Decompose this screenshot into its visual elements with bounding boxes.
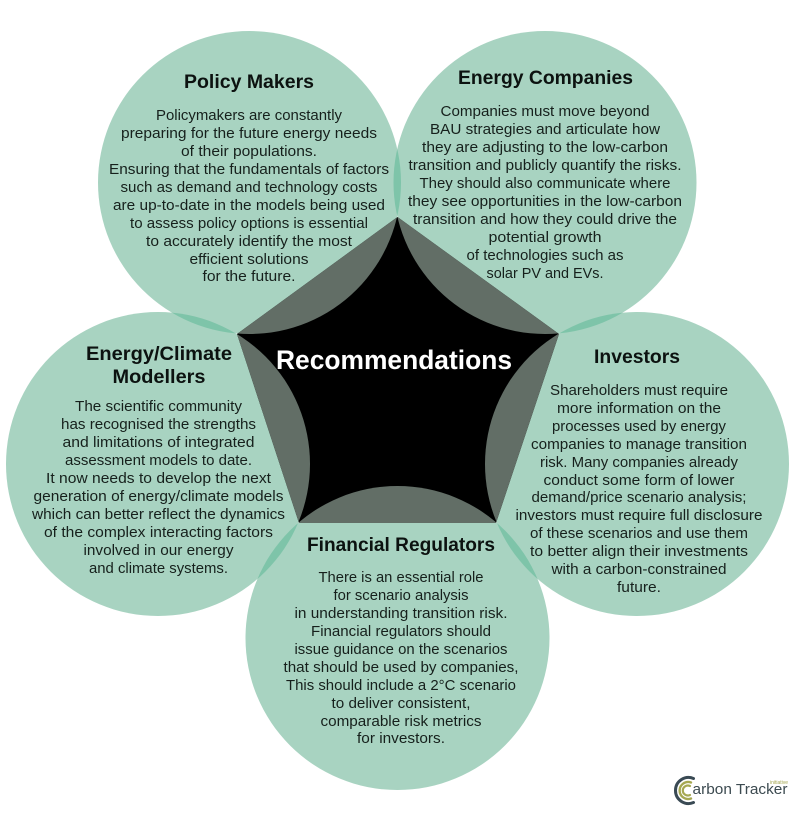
text block: energy companies: They should also communicate where	[420, 176, 670, 192]
text block: investors: companies to manage transition	[531, 437, 747, 453]
wordmark: arbon Tracker	[692, 782, 788, 798]
central pentagon	[237, 217, 559, 523]
text block: financial regulators: issue guidance on the scenarios	[294, 642, 508, 658]
text block: investors: to better align their investments	[530, 544, 748, 560]
tagline: initiative	[770, 780, 788, 786]
text block: energy/climate modellers: involved in our energy	[84, 543, 234, 559]
text block: investors: conduct some form of lower	[544, 473, 735, 489]
text block: investors	[516, 383, 762, 596]
text block: financial regulators	[284, 570, 518, 747]
text block: financial regulators: comparable risk metrics	[320, 714, 482, 730]
text block: policy makers: for the future.	[202, 269, 296, 285]
panel: policy makers	[98, 31, 401, 334]
text block: energy/climate modellers: generation of energy/climate models	[34, 489, 284, 505]
text block: investors: future.	[617, 580, 661, 596]
logo: carbon tracker	[676, 778, 788, 804]
text block: financial regulators: Financial regulators should	[311, 624, 491, 640]
text block: energy companies: they are adjusting to the low-carbon	[422, 140, 668, 156]
text block: financial regulators: to deliver consistent,	[332, 696, 470, 712]
text block: investors: risk. Many companies already	[540, 455, 739, 471]
text block: energy companies: potential growth	[488, 230, 602, 246]
heading: energy/climate modellers: Energy/Climate	[86, 344, 232, 365]
text block: energy/climate modellers: The scientific community	[75, 399, 243, 415]
text block: investors: Shareholders must require	[550, 383, 728, 399]
panel: energy companies	[394, 31, 696, 334]
text block: financial regulators: that should be used by companies,	[284, 660, 518, 676]
text block: energy/climate modellers: It now needs to develop the next	[46, 471, 271, 487]
heading: investors: Investors	[594, 347, 680, 368]
heading: energy/climate modellers	[86, 344, 232, 388]
text block: financial regulators: for scenario analysis	[334, 588, 468, 604]
text block: policy makers: Policymakers are constantly	[156, 108, 343, 124]
text block: energy companies: transition and how they could drive the	[413, 212, 677, 228]
text block: financial regulators: in understanding transition risk.	[294, 606, 508, 622]
text block: investors: with a carbon-constrained	[550, 562, 726, 578]
text block: policy makers: such as demand and technology costs	[120, 180, 378, 196]
text block: investors: of these scenarios and use them	[530, 526, 748, 542]
text block: energy/climate modellers: and limitations of integrated	[62, 435, 254, 451]
icon: concentric C rings	[676, 778, 694, 804]
text block: financial regulators: There is an essential role	[318, 570, 484, 586]
text block: energy companies: of technologies such as	[466, 248, 624, 264]
text block: policy makers: Ensuring that the fundamentals of factors	[109, 162, 389, 178]
panel: investors	[485, 312, 789, 616]
panel: financial regulators	[246, 486, 550, 790]
text block: financial regulators: for investors.	[357, 731, 445, 747]
text block: investors: more information on the	[557, 401, 721, 417]
circle overlap lenses	[172, 149, 622, 579]
text block: energy companies: transition and publicly quantify the risks.	[408, 158, 682, 174]
text block: energy/climate modellers: and climate systems.	[89, 561, 228, 577]
text block: energy/climate modellers: assessment models to date.	[65, 453, 252, 469]
text block: policy makers: to assess policy options is essential	[130, 216, 368, 232]
text block: energy companies: solar PV and EVs.	[486, 266, 604, 282]
text block: energy companies	[408, 104, 682, 282]
text block: policy makers: efficient solutions	[190, 252, 308, 268]
text block: energy companies: BAU strategies and articulate how	[430, 122, 660, 138]
text block: investors: investors must require full disclosure	[516, 508, 762, 524]
heading: policy makers: Policy Makers	[184, 72, 314, 93]
text block: policy makers	[109, 108, 389, 285]
text block: energy companies: Companies must move beyond	[440, 104, 650, 120]
text block: policy makers: are up-to-date in the models being used	[113, 198, 385, 214]
central title: Recommendations	[276, 345, 512, 375]
text block: energy/climate modellers: which can better reflect the dynamics	[31, 507, 285, 523]
text block: energy/climate modellers	[31, 399, 285, 577]
text block: energy/climate modellers: of the complex interacting factors	[44, 525, 273, 541]
panel: energy/climate modellers	[6, 312, 310, 616]
text block: investors: demand/price scenario analysis;	[532, 490, 746, 506]
heading: financial regulators: Financial Regulators	[307, 535, 495, 556]
heading: energy companies: Energy Companies	[458, 68, 633, 89]
text block: policy makers: to accurately identify the most	[146, 234, 352, 250]
text block: energy/climate modellers: has recognised the strengths	[61, 417, 256, 433]
heading: energy/climate modellers: Modellers	[112, 367, 206, 388]
text block: energy companies: they see opportunities in the low-carbon	[408, 194, 682, 210]
text block: policy makers: of their populations.	[181, 144, 317, 160]
text block: investors: processes used by energy	[552, 419, 727, 435]
text block: financial regulators: This should include a 2°C scenario	[286, 678, 516, 694]
text block: policy makers: preparing for the future energy needs	[121, 126, 377, 142]
